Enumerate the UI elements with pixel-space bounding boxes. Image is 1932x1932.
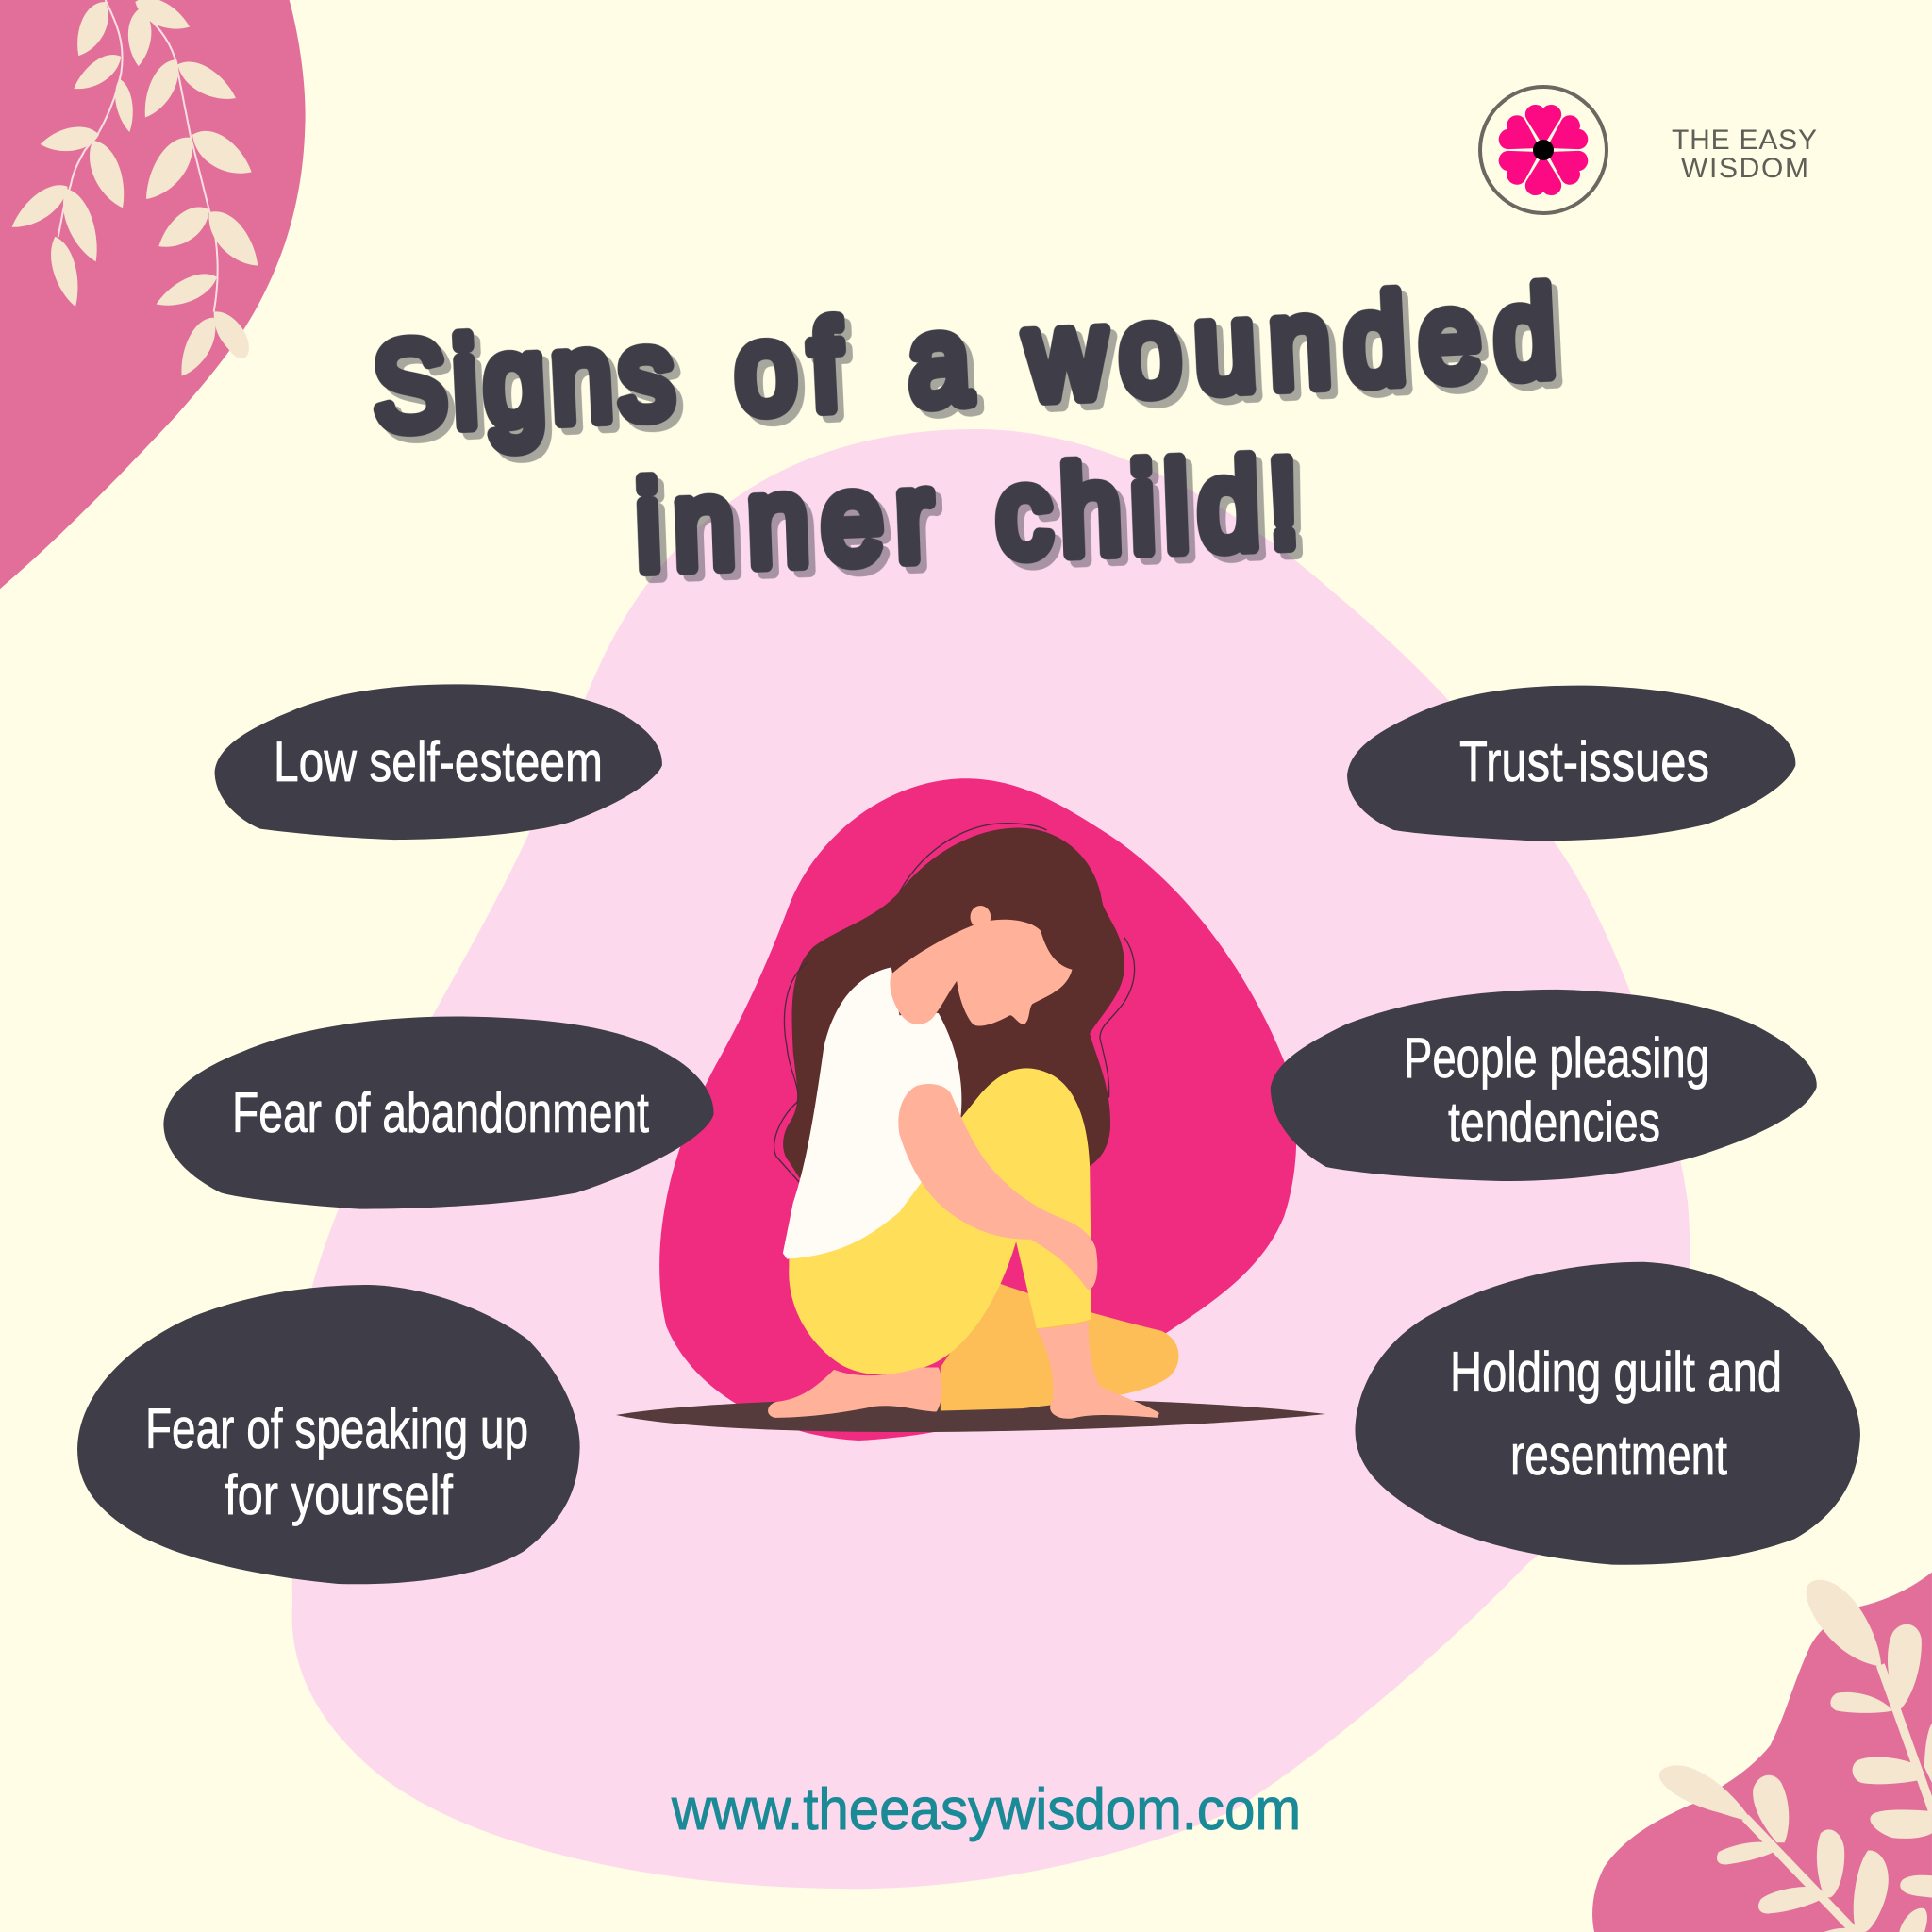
shirt — [783, 967, 961, 1259]
pill: fear of speaking up — [77, 1285, 580, 1584]
leaf stems — [1745, 1665, 1932, 1932]
title: of — [732, 295, 858, 441]
logo wordmark: WISDOM — [1681, 153, 1808, 184]
pill: people pleasing — [1271, 990, 1817, 1181]
bottom-right corner blob with leaves — [1592, 1573, 1932, 1932]
pill: low self-esteem — [215, 684, 662, 840]
trousers — [789, 1068, 1091, 1374]
title: wounded — [1023, 261, 1573, 426]
leaves — [1659, 1580, 1932, 1932]
pill: trust issues: Trust-issues — [1459, 730, 1709, 793]
floor shadow — [616, 1398, 1325, 1432]
pill: fear of speaking up: Fear of speaking up — [145, 1397, 528, 1460]
icon: heart petals — [1495, 105, 1591, 195]
arm — [898, 1084, 1097, 1290]
girl illustration — [768, 824, 1179, 1419]
pill: fear of abandonment — [163, 1016, 714, 1209]
website url: www.theeasywisdom.com — [671, 1777, 1301, 1842]
back leg — [941, 1283, 1179, 1411]
background pink blob — [292, 429, 1690, 1889]
pill: people pleasing: People pleasing — [1404, 1026, 1709, 1090]
top-left corner blob with leaves — [0, 0, 306, 589]
title: child! — [993, 433, 1310, 584]
logo: flower badge — [1480, 87, 1607, 213]
vine stems — [58, 0, 218, 311]
ear — [971, 906, 991, 928]
title: a — [906, 290, 974, 432]
logo wordmark: THE EASY — [1672, 125, 1817, 156]
title: Signs — [370, 304, 683, 458]
left foot — [768, 1367, 942, 1418]
pill: holding guilt: Holding guilt and — [1450, 1341, 1782, 1404]
head and neck — [890, 920, 1073, 1026]
right lower leg and foot — [1037, 1321, 1159, 1419]
pill: low self-esteem: Low self-esteem — [274, 730, 603, 793]
title — [370, 261, 1573, 597]
leaves — [7, 0, 267, 384]
pill: trust issues — [1347, 686, 1795, 841]
pill: fear of abandonment: Fear of abandonment — [232, 1081, 649, 1144]
pill: fear of speaking up: for yourself — [225, 1463, 453, 1526]
hair outline — [774, 824, 1135, 1182]
pill: people pleasing: tendencies — [1448, 1091, 1660, 1154]
title: inner — [634, 446, 948, 597]
central magenta blob — [659, 778, 1296, 1441]
hair — [783, 828, 1124, 1177]
pill: holding guilt — [1355, 1262, 1860, 1565]
pill: holding guilt: resentment — [1510, 1424, 1727, 1487]
logo wordmark — [1672, 125, 1817, 184]
